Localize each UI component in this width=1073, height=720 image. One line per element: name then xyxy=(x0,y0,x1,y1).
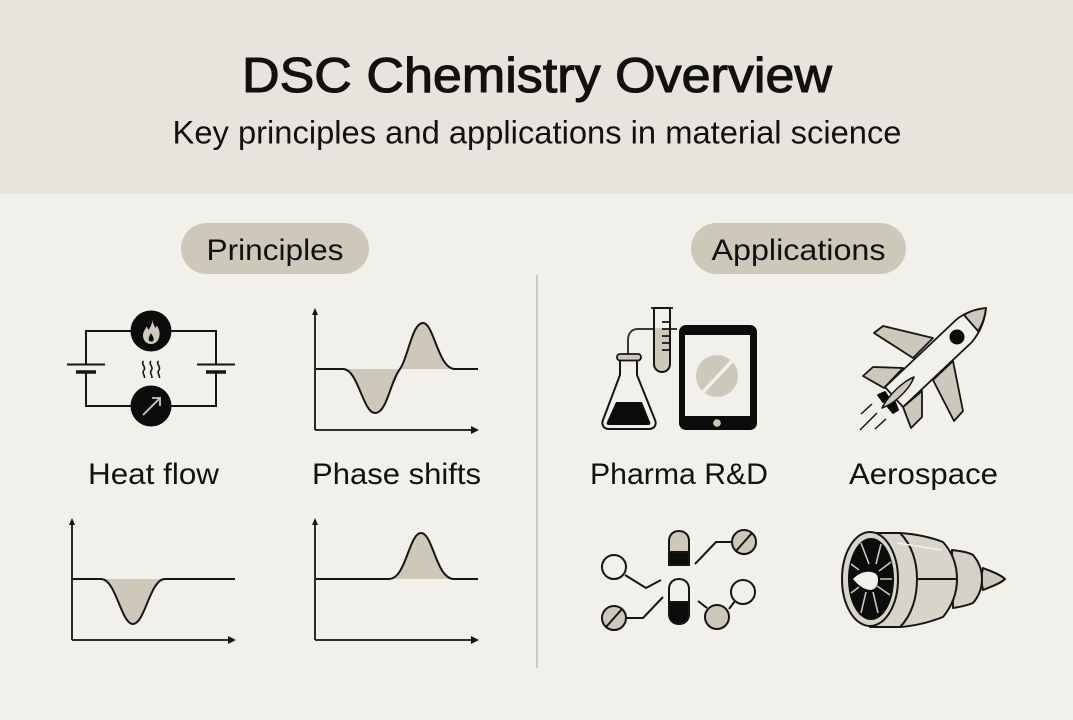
aircraft body xyxy=(885,308,986,407)
icon: lab flask, test tube and tablet xyxy=(602,308,757,430)
section pill: Principles xyxy=(181,223,369,274)
chart: phase shifts xyxy=(312,308,478,430)
label: aerospace: Aerospace xyxy=(849,458,998,491)
node: slashed bottom left xyxy=(602,606,626,630)
engine intake xyxy=(842,532,898,626)
chart: exothermic peak xyxy=(312,518,478,640)
icon: test tube xyxy=(651,308,673,372)
node: open left xyxy=(602,555,626,579)
header band xyxy=(0,0,1073,194)
chart: endothermic dip xyxy=(69,518,235,640)
engine nacelle xyxy=(870,533,957,627)
icon: jet engine turbine xyxy=(842,532,1005,627)
capsule: top xyxy=(669,531,689,565)
icon: jet aircraft xyxy=(860,308,986,430)
node: filled bottom right xyxy=(705,605,729,629)
subtitle: Key principles and applications in material science xyxy=(172,114,902,150)
icon: heat flow circuit xyxy=(67,310,235,426)
label: phase shifts: Phase shifts xyxy=(312,458,481,491)
title: DSC Chemistry Overview xyxy=(242,49,833,103)
section pill: Applications: Applications xyxy=(712,234,886,267)
icon: molecules and capsules xyxy=(602,530,756,630)
label: pharma R&D: Pharma R&D xyxy=(590,458,768,491)
capsule: bottom xyxy=(669,579,689,624)
icon: gauge node xyxy=(130,386,172,426)
icon: connecting tube xyxy=(628,329,677,354)
label: heat flow: Heat flow xyxy=(88,458,219,491)
section pill: Principles: Principles xyxy=(206,234,344,267)
node: slashed top right xyxy=(732,530,756,554)
icon: heat waves xyxy=(143,361,160,378)
icon: tablet with pill xyxy=(679,325,757,430)
node: open right xyxy=(731,580,755,604)
icon: flame node xyxy=(130,310,172,352)
aircraft nose cone xyxy=(964,308,986,331)
icon: flask xyxy=(602,354,656,429)
section pill: Applications xyxy=(691,223,906,274)
